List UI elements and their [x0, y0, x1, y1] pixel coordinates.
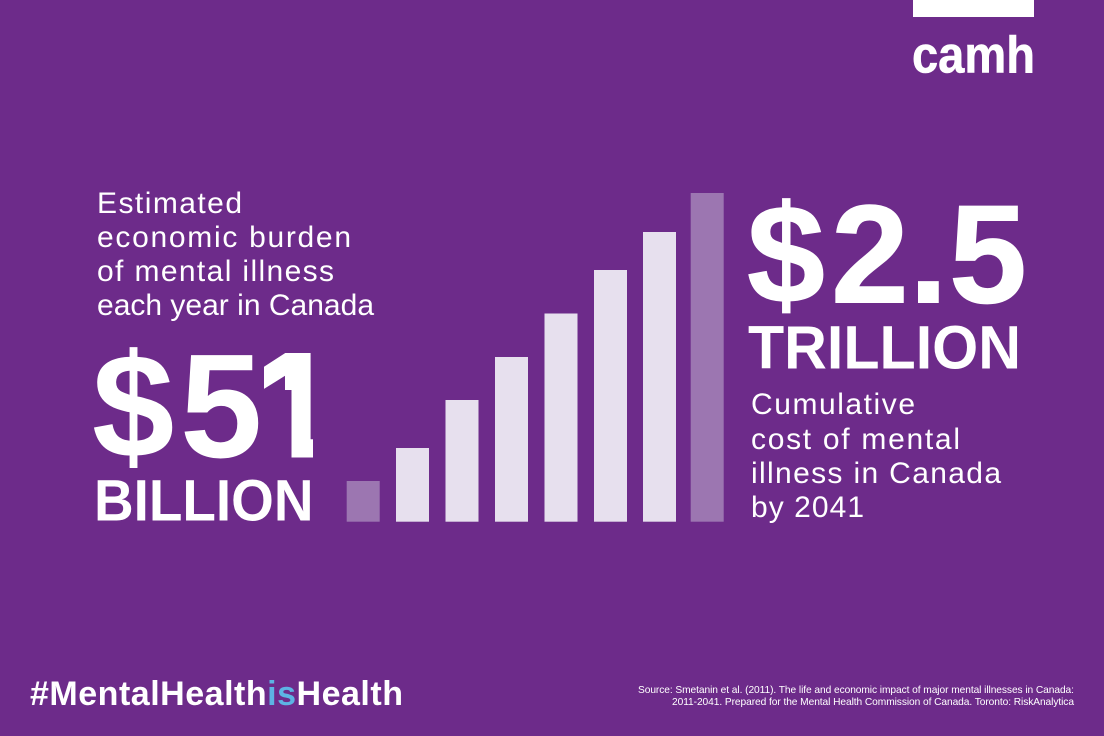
text block: cumulative cost description: Cumulative [751, 388, 915, 421]
stat: $51 billion: BILLION [94, 468, 314, 534]
text block: cumulative cost description: illness in Canada [751, 457, 1001, 490]
stat: $2.5 trillion: $2.5 [747, 176, 1027, 332]
source citation [638, 685, 1074, 708]
hashtag: #MentalHealthisHealth [30, 675, 403, 713]
text block: cumulative cost description: by 2041 [751, 491, 864, 524]
source citation: 2011-2041. Prepared for the Mental Health Commission of Canada. Toronto: RiskAnalytica [672, 697, 1074, 708]
text block: cumulative cost description [751, 388, 1001, 524]
text block: annual burden description: economic burden [97, 221, 351, 254]
logo: camh [912, 0, 1035, 84]
logo: camh: camh [912, 26, 1035, 84]
source citation: Source: Smetanin et al. (2011). The life and economic impact of major mental illnesses in Canada: [638, 685, 1074, 696]
text block: cumulative cost description: cost of mental [751, 423, 960, 456]
text block: annual burden description [97, 187, 374, 322]
stat: $51 billion [94, 347, 313, 521]
bar chart: cost growth [347, 193, 724, 522]
stat: $51 billion: 1 [252, 321, 336, 489]
stat: $51 billion: $5 [92, 324, 262, 489]
text block: annual burden description: Estimated [97, 187, 242, 220]
stat: $2.5 trillion: TRILLION [748, 314, 1021, 382]
text block: annual burden description: each year in Canada [97, 289, 374, 322]
text block: annual burden description: of mental illness [97, 255, 334, 288]
